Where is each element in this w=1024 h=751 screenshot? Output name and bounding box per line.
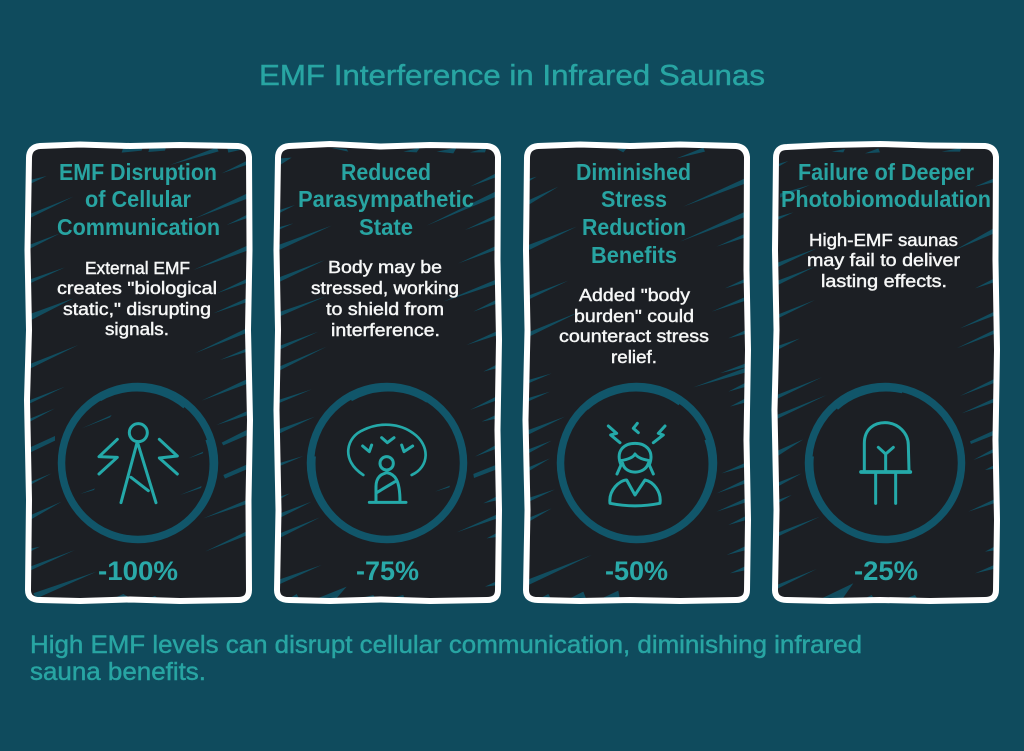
panel: diminished stress reduction benefits: [526, 144, 748, 601]
card description: counteract stress: [559, 326, 709, 346]
icon: stressed person: [608, 423, 665, 506]
card description: to shield from: [326, 299, 444, 319]
card heading: Benefits: [591, 242, 677, 268]
card heading: [298, 159, 474, 240]
card description: static," disrupting: [63, 299, 211, 319]
card heading: [576, 159, 691, 268]
card description: stressed, working: [311, 278, 459, 298]
percentage: -25%: [854, 556, 918, 586]
progress ring: [808, 386, 962, 540]
card border: [27, 144, 250, 601]
footer summary: sauna benefits.: [30, 658, 206, 686]
card description: External EMF: [85, 258, 190, 278]
card heading: Photobiomodulation: [781, 186, 991, 212]
icon: LED bulb: [861, 423, 910, 503]
card heading: Reduction: [582, 214, 686, 240]
footer summary: High EMF levels can disrupt cellular communication, diminishing infrared: [30, 631, 862, 659]
card description: creates "biological: [57, 278, 217, 298]
icon: meditating person under stress: [348, 425, 426, 502]
progress ring: [560, 386, 714, 540]
card heading: Reduced: [341, 159, 431, 185]
percentage: -75%: [356, 556, 419, 586]
card heading: Parasympathetic: [298, 186, 474, 212]
card description: interference.: [331, 320, 440, 340]
card description: Body may be: [328, 257, 442, 277]
percentage: -50%: [605, 556, 668, 586]
card description: may fail to deliver: [807, 250, 960, 270]
card description: [311, 257, 459, 340]
footer summary: [30, 631, 862, 686]
card heading: Communication: [57, 214, 220, 240]
panel: reduced parasympathetic state: [276, 144, 499, 601]
card heading: of Cellular: [85, 186, 191, 212]
card heading: Diminished: [576, 159, 691, 185]
card description: [57, 258, 217, 339]
card description: burden" could: [574, 306, 694, 326]
card heading: Stress: [601, 186, 667, 212]
card border: [526, 144, 748, 601]
card heading: Failure of Deeper: [798, 159, 974, 185]
card description: [807, 230, 960, 291]
card heading: [57, 159, 220, 240]
title: EMF Interference in Infrared Saunas: [259, 60, 765, 92]
card heading: [781, 159, 991, 212]
panel: EMF disruption of cellular communication: [27, 144, 250, 601]
panel: failure of deeper photobiomodulation: [774, 144, 997, 601]
card border: [774, 144, 997, 601]
card heading: State: [359, 214, 413, 240]
card description: signals.: [105, 319, 169, 339]
icon: antenna with signal bolts: [99, 424, 177, 503]
card description: [559, 285, 709, 367]
card description: High-EMF saunas: [809, 230, 958, 250]
card description: relief.: [611, 347, 657, 367]
progress ring: [310, 386, 464, 540]
card description: lasting effects.: [821, 271, 947, 291]
card description: Added "body: [579, 285, 690, 305]
card heading: EMF Disruption: [59, 159, 217, 185]
progress ring: [62, 386, 214, 540]
card border: [276, 144, 499, 601]
percentage: -100%: [98, 556, 178, 586]
